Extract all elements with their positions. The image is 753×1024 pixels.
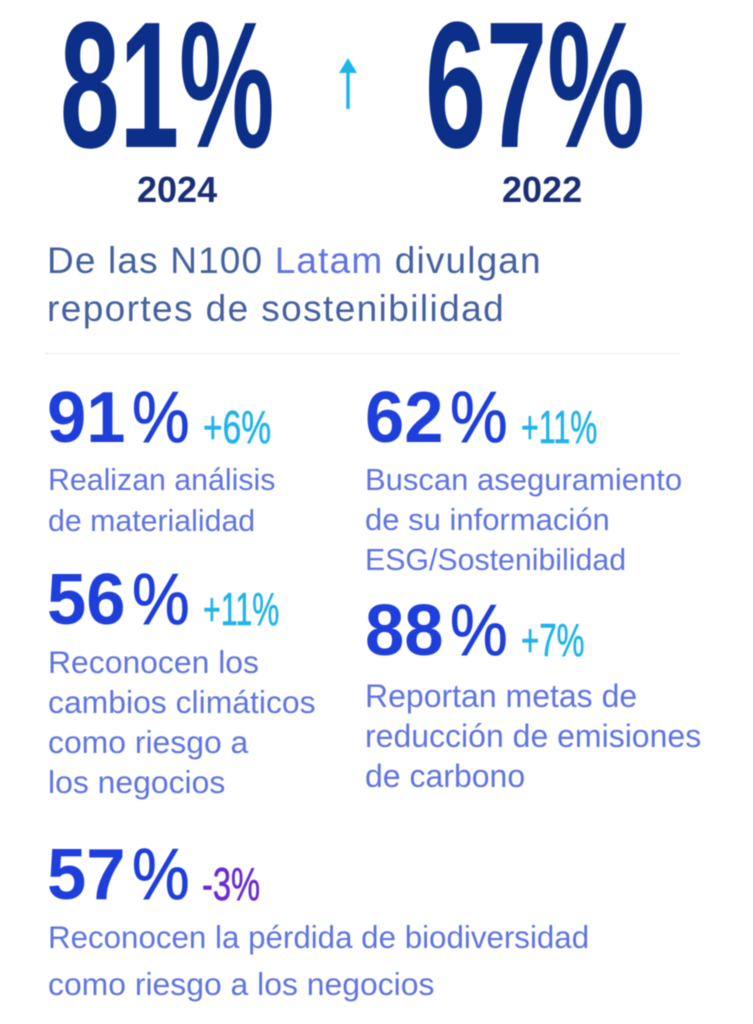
stat: 56% climate change risk <box>47 560 316 800</box>
stat: 62% assurance: de su información <box>365 502 610 537</box>
lead text <box>47 240 542 330</box>
stat: 91% materiality analysis: +6% <box>203 401 271 453</box>
stat: 91% materiality analysis <box>47 378 275 538</box>
lead text: De las N100 Latam divulgan <box>47 240 542 281</box>
stat: 88% carbon targets: Reportan metas de <box>365 678 637 714</box>
stat: 88% carbon targets: +7% <box>521 614 584 666</box>
stat: 56% climate change risk: Reconocen los <box>48 644 259 680</box>
year label 2022: 2022 <box>502 169 582 210</box>
stat: 57% biodiversity loss: Reconocen la pérdida de biodiversidad <box>48 920 589 955</box>
stat: 62% assurance: ESG/Sostenibilidad <box>365 544 626 577</box>
stat: 57% biodiversity loss <box>47 835 589 1002</box>
stat: 56% climate change risk: 56 <box>47 560 125 640</box>
stat: 88% carbon targets <box>365 591 701 794</box>
stat: 56% climate change risk: como riesgo a <box>48 724 248 760</box>
stat: 91% materiality analysis: 91 <box>47 378 125 458</box>
stat: 91% materiality analysis: Realizan análisis <box>48 464 275 497</box>
stat: 62% assurance: Buscan aseguramiento <box>365 462 682 497</box>
stat: 57% biodiversity loss: 57 <box>47 835 125 915</box>
stat: 57% biodiversity loss: como riesgo a los negocios <box>48 966 434 1002</box>
stat: 56% climate change risk: los negocios <box>48 764 225 800</box>
stat: 91% materiality analysis: de materialidad <box>48 505 255 538</box>
stat: 57% biodiversity loss: % <box>132 835 190 915</box>
stat: 57% biodiversity loss: -3% <box>202 858 260 910</box>
stat: 56% climate change risk: cambios climáticos <box>48 684 316 720</box>
stat: 88% carbon targets: 88 <box>365 591 443 671</box>
stat: 62% assurance: % <box>450 378 508 458</box>
lead text: reportes de sostenibilidad <box>47 288 505 329</box>
divider <box>46 353 680 354</box>
icon: up arrow <box>338 58 358 110</box>
stat: 88% carbon targets: de carbono <box>365 758 525 794</box>
stat: 88% carbon targets: % <box>450 591 508 671</box>
stat: 62% assurance <box>365 378 682 577</box>
stat: 56% climate change risk: % <box>132 560 190 640</box>
year label 2024: 2024 <box>137 169 217 210</box>
stat: 91% materiality analysis: % <box>132 378 190 458</box>
stat: 62% assurance: +11% <box>521 401 597 453</box>
stat: 88% carbon targets: reducción de emisiones <box>365 718 701 754</box>
stat: 62% assurance: 62 <box>365 378 443 458</box>
stat: 56% climate change risk: +11% <box>203 583 279 635</box>
